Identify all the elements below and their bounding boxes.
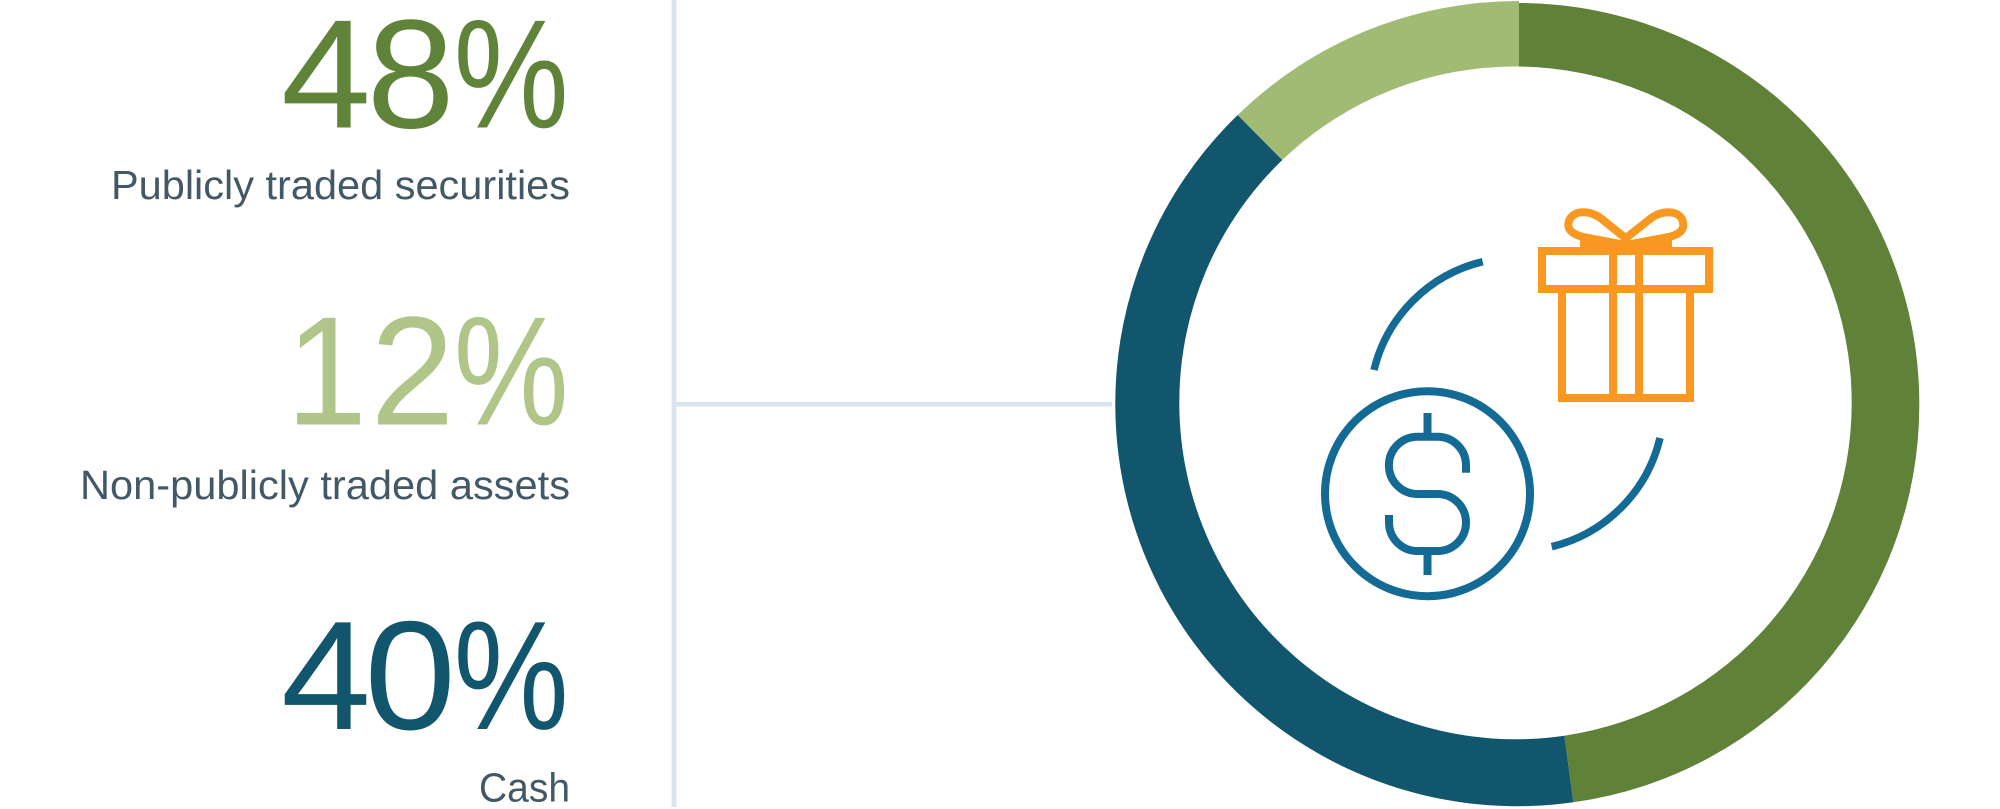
segment: non-publicly traded assets 12%: [1238, 1, 1519, 160]
value: 48%: [281, 0, 569, 160]
value: 40%: %: [454, 589, 569, 762]
value: 12%: [286, 284, 569, 458]
stat: 12% non-publicly traded assets: [80, 284, 570, 508]
value: 40%: 4: [281, 589, 371, 762]
vertical divider line: [672, 0, 676, 807]
exchange arcs between coin and gift: [1374, 262, 1660, 547]
gift body: [1562, 289, 1690, 398]
value: 12%: 1: [286, 284, 367, 458]
value: 12%: %: [454, 284, 569, 458]
donut chart: [1115, 1, 1919, 806]
icon: gift box: [1542, 212, 1709, 398]
segment: publicly traded securities 48%: [1519, 3, 1919, 802]
stat: 48% publicly traded securities: [111, 0, 570, 208]
dollar sign: [1389, 413, 1466, 575]
arc: upper left: [1374, 262, 1483, 370]
label: publicly traded securities: Publicly traded securities: [111, 162, 570, 208]
connector line to donut: [676, 402, 1112, 407]
gift ribbon: [1613, 251, 1639, 398]
value: 40%: 0: [364, 589, 456, 762]
icon: dollar coin: [1325, 391, 1530, 596]
gift bow: [1568, 212, 1683, 245]
label: non-publicly traded assets: Non-publicly traded assets: [80, 462, 570, 508]
arc: lower right: [1552, 438, 1660, 547]
gift bow knot wedges: [1580, 238, 1672, 247]
segment: cash 40%: [1115, 115, 1573, 806]
stat: 40% cash: [281, 589, 570, 809]
value: 12%: 2: [370, 284, 454, 458]
value: 40%: [281, 589, 569, 762]
gift lid: [1542, 251, 1709, 289]
coin outline: [1325, 391, 1530, 596]
